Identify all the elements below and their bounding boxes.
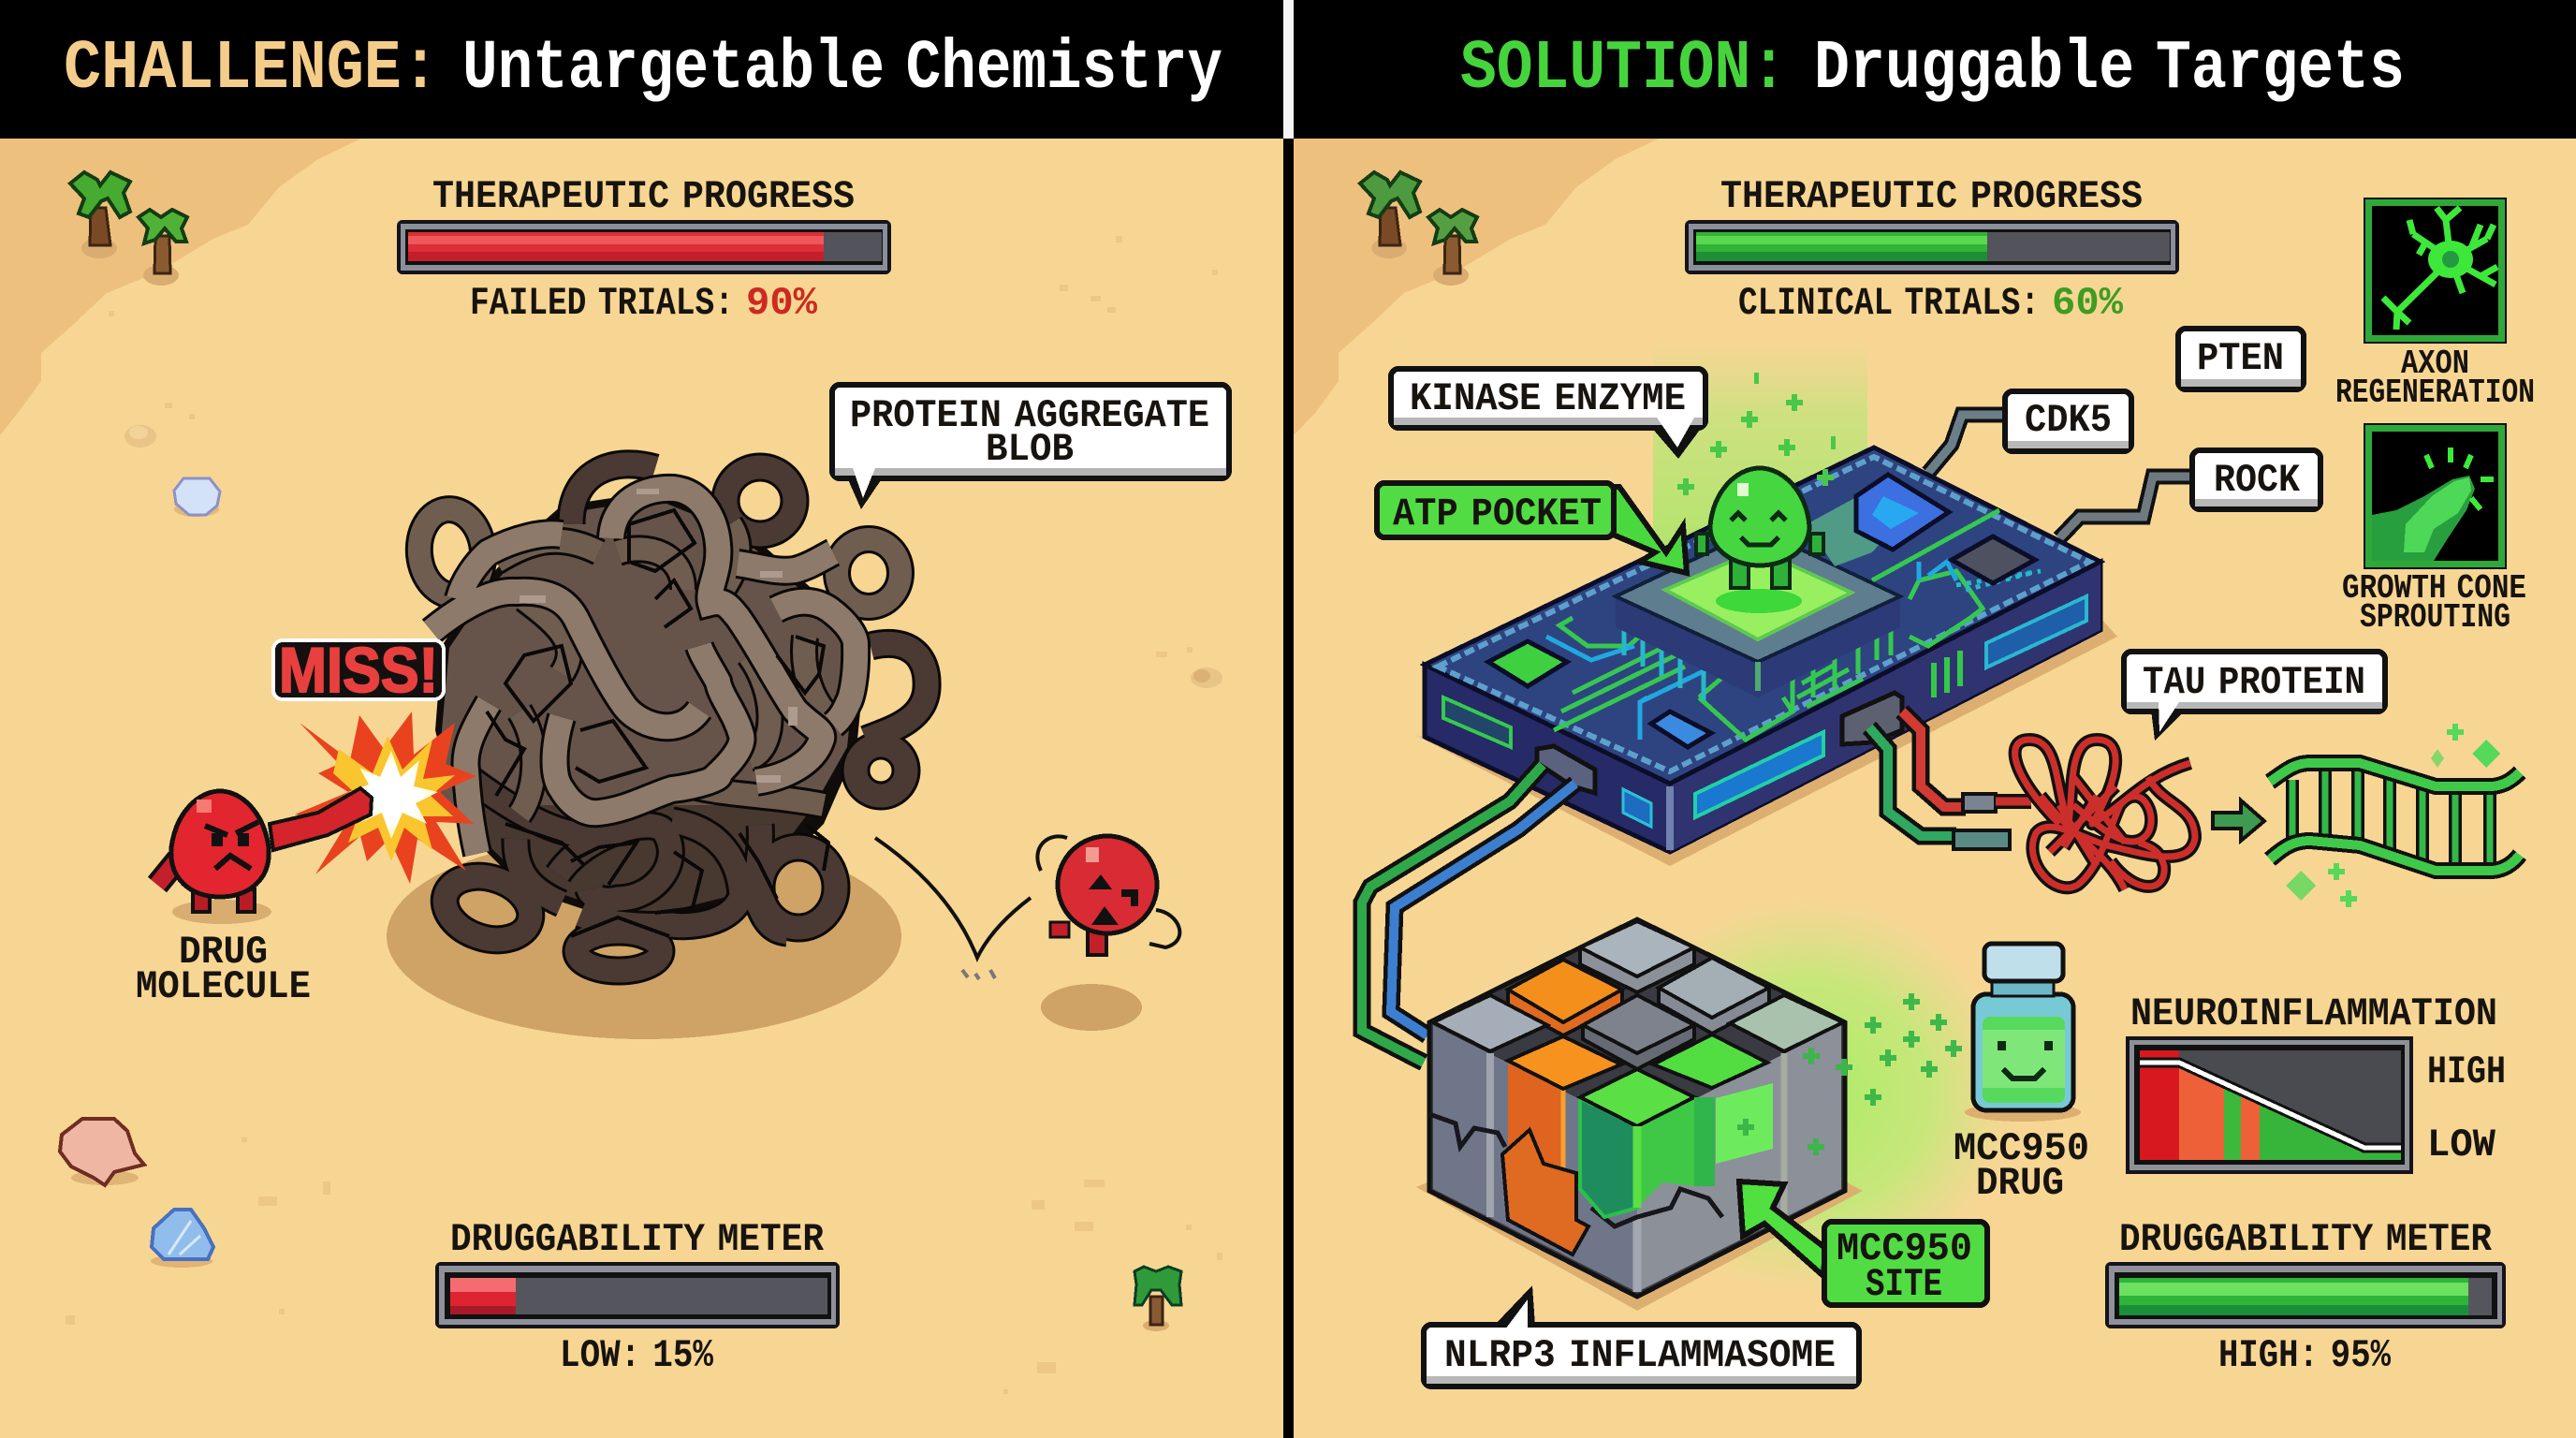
value: HIGH: 95% bbox=[2218, 1333, 2392, 1378]
callout: ATP pocket bbox=[1377, 483, 1687, 573]
feet bbox=[193, 889, 255, 912]
heading: challenge: CHALLENGE: bbox=[64, 30, 439, 109]
orange puzzle piece bbox=[1502, 1130, 1588, 1255]
callout: kinase enzyme bbox=[1391, 369, 1705, 459]
legs bbox=[1696, 534, 1823, 588]
tangled tau protein bbox=[2015, 740, 2195, 889]
bounce trajectory bbox=[875, 838, 1031, 979]
label line 2: SPROUTING bbox=[2360, 598, 2510, 637]
highlights bbox=[520, 489, 798, 783]
label: DRUGGABILITY METER bbox=[2119, 1217, 2493, 1262]
body bbox=[171, 791, 269, 897]
sand specks bbox=[66, 236, 1222, 1394]
chart areas bbox=[2140, 1050, 2179, 1160]
callout text line 2: BLOB bbox=[986, 427, 1074, 472]
icon: growth cone bbox=[2372, 448, 2494, 561]
bar bbox=[435, 1262, 840, 1328]
shells bottom left bbox=[60, 1119, 213, 1268]
cube faces bbox=[1429, 919, 1845, 1297]
label: drug molecule: DRUG bbox=[179, 930, 268, 975]
bar bbox=[1685, 220, 2179, 274]
glowing site bbox=[1716, 1083, 1773, 1164]
meter: druggability low bbox=[435, 1217, 840, 1378]
tile tops bbox=[1433, 921, 1843, 1089]
strand outlines bbox=[487, 510, 828, 936]
label: CDK5 bbox=[2005, 391, 2131, 451]
label line 2: REGENERATION bbox=[2335, 374, 2535, 412]
label: ROCK bbox=[2192, 450, 2320, 509]
dune corner bbox=[0, 139, 361, 435]
callout: miss bbox=[273, 635, 444, 706]
callout text line 1: PROTEIN AGGREGATE bbox=[850, 393, 1209, 438]
label: THERAPEUTIC PROGRESS bbox=[432, 174, 855, 219]
icon: palm trees right bbox=[1360, 172, 1477, 286]
ports bbox=[1537, 693, 1902, 793]
bar bbox=[397, 220, 891, 274]
value: CLINICAL TRIALS: bbox=[1738, 281, 2040, 326]
green glow around drug site bbox=[1601, 899, 2012, 1292]
icon: palm trees left bbox=[70, 172, 187, 286]
dune corner bbox=[1294, 139, 1659, 435]
progress: therapeutic clinical trials bbox=[1685, 174, 2179, 326]
label: PTEN bbox=[2178, 329, 2304, 389]
board traces bbox=[1546, 510, 2041, 740]
percent: 90% bbox=[746, 281, 818, 326]
label: MCC950 drug: DRUG bbox=[1976, 1161, 2064, 1206]
callout: MCC950 site: SITE bbox=[1866, 1262, 1942, 1307]
label: AXON bbox=[2401, 345, 2469, 383]
drug molecule red bbox=[157, 788, 372, 924]
panel: solution sand background bbox=[1294, 139, 2576, 1438]
raised chip bbox=[1616, 529, 1900, 697]
arrow: tau to repaired bbox=[2213, 800, 2264, 841]
icon: small palm bbox=[1134, 1267, 1181, 1331]
pointer arrow: MCC950 site bbox=[1739, 1181, 1825, 1276]
drug particles bbox=[1865, 993, 1962, 1106]
label: ROCK: ROCK bbox=[2214, 458, 2301, 503]
chart: neuroinflammation bbox=[2126, 991, 2506, 1174]
miss text: MISS! bbox=[279, 635, 438, 706]
cables to inflammasome bbox=[1362, 765, 1575, 1063]
label: MCC950 drug bbox=[1954, 1126, 2089, 1206]
cable: ROCK bbox=[2059, 477, 2190, 538]
panel: growth cone sprouting bbox=[2342, 424, 2526, 637]
header: solution bbox=[1294, 0, 2576, 139]
value: LOW: 15% bbox=[560, 1333, 714, 1378]
sparkles bbox=[2286, 724, 2500, 907]
body bbox=[1710, 468, 1809, 565]
cable: CDK5 bbox=[1928, 415, 2002, 473]
shadow under blob bbox=[387, 833, 901, 1039]
floating particles bbox=[1677, 373, 1836, 495]
tile seams bbox=[1429, 1114, 1722, 1226]
green bits on cube bbox=[1737, 1048, 1852, 1155]
chart title: NEUROINFLAMMATION bbox=[2130, 991, 2497, 1036]
label: drug molecule bbox=[136, 930, 311, 1009]
board side windows bbox=[1443, 596, 2086, 827]
callout: protein aggregate blob bbox=[832, 385, 1229, 509]
progress: therapeutic failed trials bbox=[397, 174, 891, 326]
icon: neuron bbox=[2383, 208, 2497, 330]
chips bbox=[1488, 475, 2035, 747]
heading: druggable targets: Druggable Targets bbox=[1814, 30, 2405, 109]
callout: MCC950 site: MCC950 bbox=[1837, 1226, 1972, 1271]
bottle: MCC950 drug bbox=[1965, 944, 2081, 1122]
value: FAILED TRIALS: bbox=[470, 281, 734, 326]
tan strands bbox=[432, 489, 856, 854]
punching arm bbox=[270, 788, 372, 850]
meter: druggability high bbox=[2105, 1217, 2506, 1378]
center divider bbox=[1283, 0, 1294, 1438]
callout: tau protein: TAU PROTEIN bbox=[2143, 660, 2365, 705]
green light beam bbox=[1653, 339, 1867, 592]
mascot: kinase enzyme bbox=[1696, 468, 1823, 588]
arms bbox=[157, 859, 178, 885]
callout: tau protein bbox=[2124, 652, 2385, 741]
explosion impact bbox=[295, 712, 476, 884]
green pillar bbox=[1580, 1069, 1715, 1217]
callout: ATP pocket: ATP POCKET bbox=[1393, 492, 1602, 536]
label: drug molecule: MOLECULE bbox=[136, 964, 311, 1009]
axis label high: HIGH bbox=[2427, 1049, 2506, 1094]
callout: NLRP3 inflammasome bbox=[1424, 1285, 1859, 1387]
cube shadow bbox=[1416, 1181, 1863, 1311]
label: MCC950 drug: MCC950 bbox=[1954, 1126, 2089, 1171]
bar bbox=[2105, 1262, 2506, 1328]
green ladder repaired protein bbox=[2270, 763, 2520, 871]
dark strands bbox=[436, 464, 927, 971]
protein aggregate tangle bbox=[415, 464, 927, 971]
label: CDK5: CDK5 bbox=[2025, 398, 2112, 443]
panel: axon regeneration bbox=[2335, 198, 2535, 412]
beach shells left top bbox=[124, 425, 220, 517]
heading: untargetable chemistry: Untargetable Chemistry bbox=[462, 30, 1222, 109]
NLRP3 inflammasome cube bbox=[1416, 919, 1863, 1311]
board sides bbox=[1425, 562, 2100, 852]
medium strands bbox=[415, 506, 900, 814]
header: challenge bbox=[0, 0, 1283, 139]
board top bbox=[1425, 448, 2100, 784]
bounced molecule bbox=[1037, 836, 1179, 1031]
label: DRUGGABILITY METER bbox=[450, 1217, 825, 1262]
small rock right bbox=[1191, 668, 1222, 688]
panel: challenge sand background bbox=[0, 139, 1283, 1438]
label: THERAPEUTIC PROGRESS bbox=[1720, 174, 2143, 219]
trend line bbox=[2140, 1063, 2401, 1148]
callout: MCC950 site bbox=[1824, 1222, 1987, 1307]
label: PTEN: PTEN bbox=[2197, 336, 2284, 381]
board shadow bbox=[1415, 618, 2117, 866]
circuit board bbox=[1415, 448, 2117, 866]
cables to tau bbox=[1869, 712, 2031, 849]
chart frame bbox=[2126, 1036, 2413, 1174]
axis label low: LOW bbox=[2427, 1123, 2496, 1167]
percent: 60% bbox=[2052, 281, 2124, 326]
face bbox=[205, 822, 258, 869]
callout: kinase enzyme: KINASE ENZYME bbox=[1410, 376, 1686, 421]
heading: solution: SOLUTION: bbox=[1460, 30, 1787, 109]
label: GROWTH CONE bbox=[2342, 569, 2526, 608]
face bbox=[1731, 513, 1786, 545]
callout: NLRP3 inflammasome: NLRP3 INFLAMMASOME bbox=[1444, 1333, 1836, 1378]
